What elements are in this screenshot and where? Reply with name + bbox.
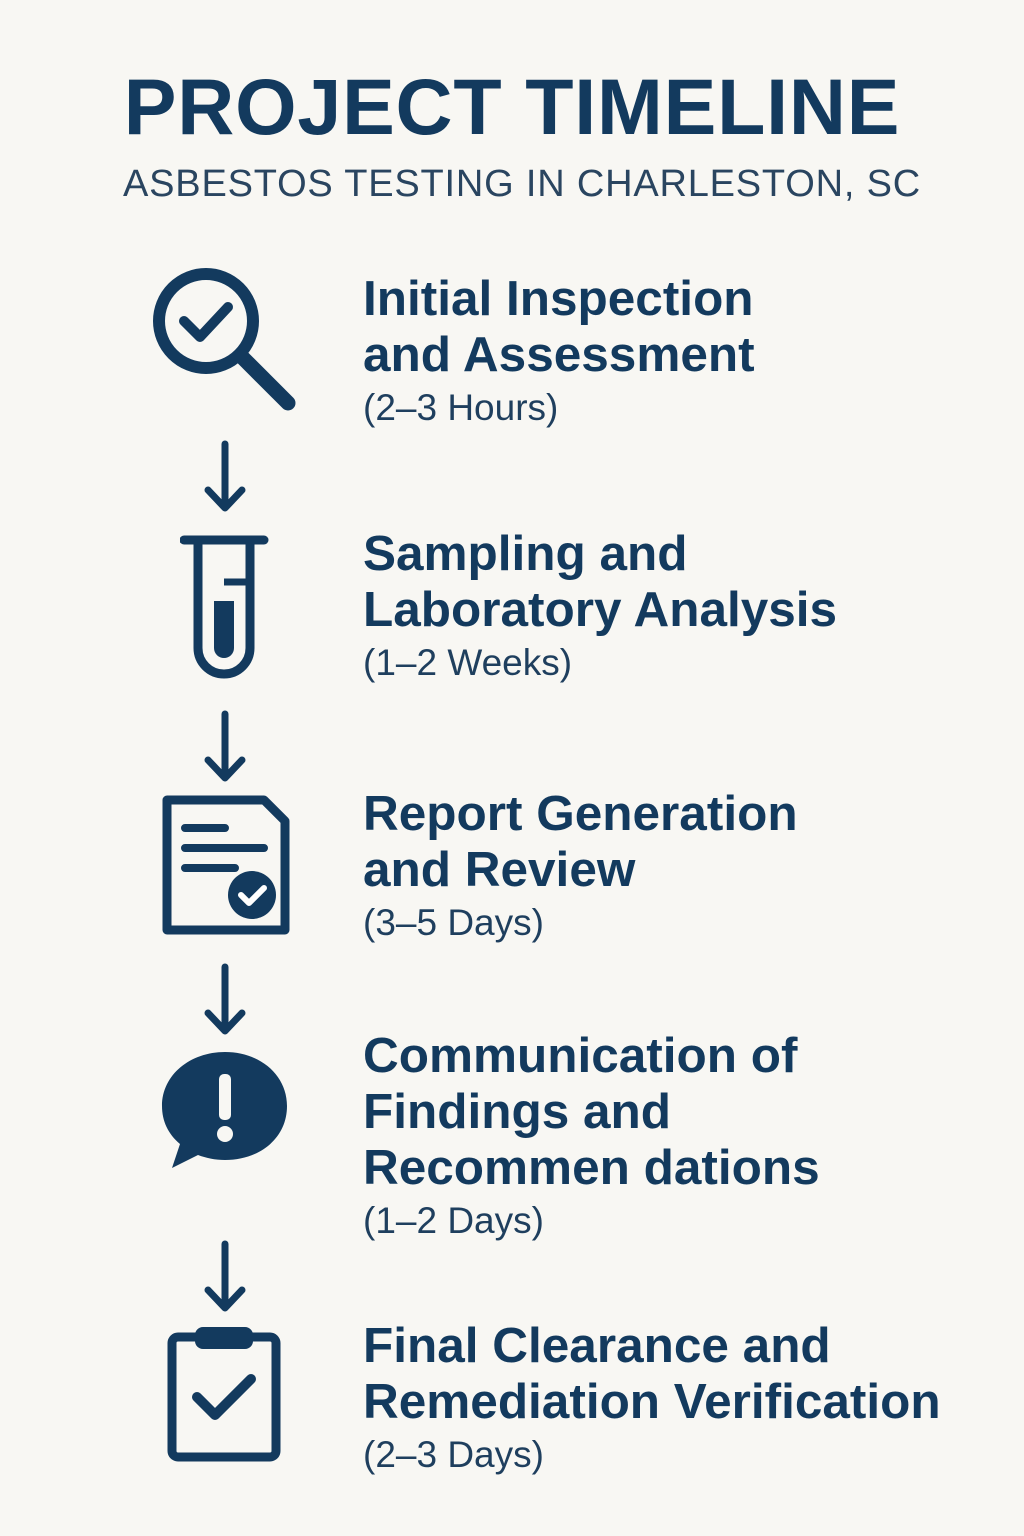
icon: magnifier	[153, 268, 296, 410]
step 4 text: Communication of	[363, 1028, 797, 1083]
step 2 text: Laboratory Analysis	[363, 582, 837, 637]
step 5 text: Final Clearance and	[363, 1318, 831, 1373]
icon: speech bubble alert	[162, 1052, 287, 1168]
arrow 3	[204, 964, 246, 1034]
icon: test tube	[180, 536, 268, 678]
step 4 text: Findings and	[363, 1084, 671, 1139]
title: PROJECT TIMELINE	[124, 62, 900, 151]
icon: clipboard	[168, 1327, 280, 1462]
step 5 text	[363, 1318, 941, 1475]
step 3 text: and Review	[363, 842, 635, 897]
step 3 text: Report Generation	[363, 786, 798, 841]
step 3 text: (3–5 Days)	[363, 902, 544, 943]
step 1 text	[363, 271, 755, 428]
step 5 text: Remediation Verification	[363, 1374, 941, 1429]
step 2 text: Sampling and	[363, 526, 688, 581]
step 1 text: Initial Inspection	[363, 271, 754, 326]
step 4 text: Recommen dations	[363, 1140, 820, 1195]
icon: document	[162, 796, 290, 934]
step 2 text: (1–2 Weeks)	[363, 642, 572, 683]
step 4 text	[363, 1028, 820, 1241]
subtitle: ASBESTOS TESTING IN CHARLESTON, SC	[123, 163, 921, 205]
step 2 text	[363, 526, 837, 683]
step 4 text: (1–2 Days)	[363, 1200, 544, 1241]
arrow 1	[204, 440, 246, 512]
step 5 text: (2–3 Days)	[363, 1434, 544, 1475]
arrow 4	[204, 1240, 246, 1312]
step 3 text	[363, 786, 798, 943]
step 1 text: and Assessment	[363, 327, 755, 382]
arrow 2	[204, 710, 246, 782]
step 1 text: (2–3 Hours)	[363, 387, 558, 428]
